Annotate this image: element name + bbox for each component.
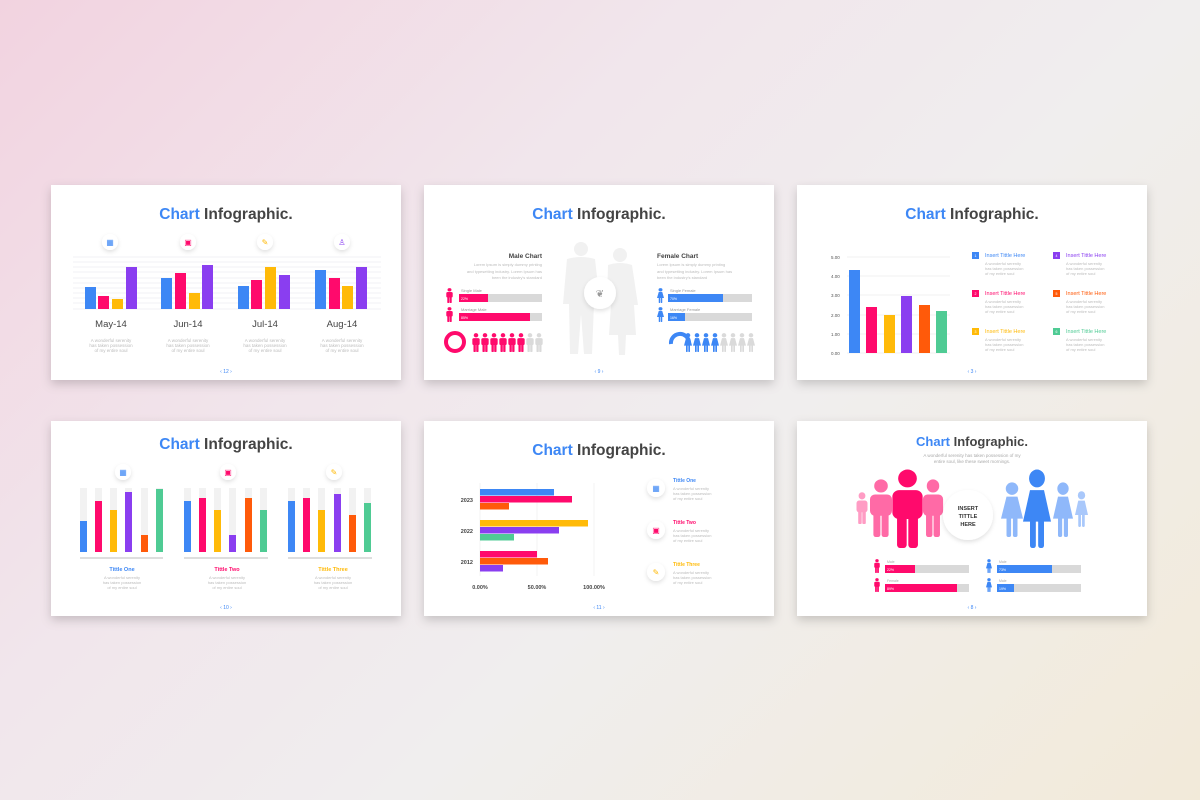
center icon circle xyxy=(584,277,616,309)
legend: has taken possession xyxy=(1066,266,1104,271)
page number: ‹ 10 › xyxy=(220,605,232,611)
center circle: TITTLE xyxy=(959,514,978,520)
descriptions: A wonderful serenity xyxy=(245,338,286,343)
male figures xyxy=(856,470,943,548)
center circle: HERE xyxy=(960,522,976,528)
legend: has taken possession xyxy=(985,304,1023,309)
slide 5: horizontal bar chart: ▣ xyxy=(652,526,660,535)
legend: Insert Tittle Here xyxy=(985,253,1025,259)
slide 1: monthly bar chart: ▣ xyxy=(184,238,192,247)
axis labels: 2023 xyxy=(461,498,473,504)
month labels: Jun-14 xyxy=(173,319,203,330)
subtitle: A wonderful serenity has taken possession of my xyxy=(923,453,1021,458)
legend: 5 xyxy=(1056,292,1058,296)
slide 5: horizontal bar chart: Tittle Three xyxy=(673,562,700,568)
slide 5: horizontal bar chart xyxy=(424,421,774,616)
title: Chart Infographic. xyxy=(159,436,293,453)
horizontal bars xyxy=(480,489,588,572)
column groups xyxy=(80,488,371,552)
icons xyxy=(115,464,342,480)
slide 1: monthly bar chart: ♙ xyxy=(338,238,346,247)
descriptions: of my entire soul xyxy=(248,348,282,353)
female panel: been the industry's standard xyxy=(657,275,707,280)
female figures xyxy=(1001,470,1088,548)
legend: has taken possession xyxy=(985,266,1023,271)
legend: of my entire soul xyxy=(985,271,1014,276)
slide 4: progress column groups: ▣ xyxy=(224,468,232,477)
axis labels xyxy=(831,255,840,356)
month labels xyxy=(95,319,357,330)
descriptions: of my entire soul xyxy=(171,348,205,353)
subtitle: entire soul, like these sweet mornings. xyxy=(934,459,1010,464)
progress bars: 22% xyxy=(887,568,894,572)
descriptions: has taken possession xyxy=(320,343,364,348)
slide 4: progress column groups: of my entire soul xyxy=(212,585,242,590)
slide 5: horizontal bar chart: ▦ xyxy=(652,484,660,493)
month labels: Jul-14 xyxy=(252,319,278,330)
axis labels: 1.00 xyxy=(831,332,840,337)
center circle xyxy=(943,490,993,540)
slide 5: horizontal bar chart: A wonderful serenity xyxy=(673,570,709,575)
legend: 3 xyxy=(975,330,977,334)
legend: Insert Tittle Here xyxy=(1066,329,1106,335)
group titles xyxy=(109,567,348,573)
female panel: Marriage Female xyxy=(670,307,701,312)
slide 5: horizontal bar chart: ✎ xyxy=(653,568,659,577)
male panel xyxy=(446,253,543,352)
slide 4: progress column groups: has taken possession xyxy=(103,580,141,585)
silhouettes xyxy=(563,242,638,355)
female panel: 16% xyxy=(670,316,677,320)
axis labels: 50.00% xyxy=(528,585,546,591)
descriptions: has taken possession xyxy=(243,343,287,348)
female panel: Female Chart xyxy=(657,253,699,260)
month labels: May-14 xyxy=(95,319,127,330)
descriptions xyxy=(89,338,364,353)
legend: Insert Tittle Here xyxy=(1066,291,1106,297)
slide 5: horizontal bar chart: of my entire soul xyxy=(673,580,702,585)
slide 1: monthly bar chart xyxy=(51,185,401,380)
axis labels: 5.00 xyxy=(831,255,840,260)
female panel: Single Female xyxy=(670,288,696,293)
axis labels: 3.00 xyxy=(831,293,840,298)
slide 5: horizontal bar chart: Tittle One xyxy=(673,478,696,484)
legend: Insert Tittle Here xyxy=(985,291,1025,297)
title: Chart Infographic. xyxy=(532,442,666,459)
female panel xyxy=(657,253,755,352)
page number: ‹ 12 › xyxy=(220,369,232,375)
legend: has taken possession xyxy=(1066,304,1104,309)
axis labels: 0.00 xyxy=(831,351,840,356)
month labels: Aug-14 xyxy=(327,319,357,330)
slide 3: column chart with legend xyxy=(797,185,1147,380)
group titles: Tittle Two xyxy=(214,567,240,573)
legend: of my entire soul xyxy=(1066,347,1095,352)
slide 4: progress column groups: A wonderful serenity xyxy=(104,575,140,580)
female panel: 70% xyxy=(670,297,677,301)
icons xyxy=(102,234,350,250)
axis labels: 100.00% xyxy=(583,585,605,591)
slide 5: horizontal bar chart: has taken possession xyxy=(673,491,711,496)
legend: Insert Tittle Here xyxy=(1066,253,1106,259)
slide 4: progress column groups: ▦ xyxy=(119,468,127,477)
legend: of my entire soul xyxy=(985,309,1014,314)
slide 6: people comparison xyxy=(797,421,1147,616)
legend: A wonderful serenity xyxy=(1066,261,1102,266)
group titles: Tittle Three xyxy=(318,567,348,573)
legend: 4 xyxy=(1056,254,1058,258)
descriptions: has taken possession xyxy=(166,343,210,348)
progress bars: 19% xyxy=(999,587,1006,591)
progress bars: Male xyxy=(999,579,1007,583)
progress bars xyxy=(874,559,1081,592)
legend: Insert Tittle Here xyxy=(985,329,1025,335)
subtitle xyxy=(923,453,1021,464)
legend: A wonderful serenity xyxy=(1066,299,1102,304)
descriptions: A wonderful serenity xyxy=(322,338,363,343)
slide 4: progress column groups: A wonderful serenity xyxy=(315,575,351,580)
legend: has taken possession xyxy=(1066,342,1104,347)
slide 5: horizontal bar chart: A wonderful serenity xyxy=(673,528,709,533)
legend: A wonderful serenity xyxy=(985,337,1021,342)
legend: of my entire soul xyxy=(985,347,1014,352)
slide 5: horizontal bar chart: of my entire soul xyxy=(673,496,702,501)
descriptions: of my entire soul xyxy=(94,348,128,353)
male panel: Marriage Male xyxy=(461,307,487,312)
axis labels: 4.00 xyxy=(831,274,840,279)
slide 2: male / female chart xyxy=(424,185,774,380)
title: Chart Infographic. xyxy=(905,206,1039,223)
legend: of my entire soul xyxy=(1066,309,1095,314)
slide 1: monthly bar chart: ▦ xyxy=(106,238,114,247)
slide 5: horizontal bar chart: of my entire soul xyxy=(673,538,702,543)
page number: ‹ 3 › xyxy=(968,369,977,375)
slide 4: progress column groups: ✎ xyxy=(331,468,337,477)
legend xyxy=(972,252,1106,352)
progress bars: 89% xyxy=(887,587,894,591)
slide 5: horizontal bar chart: has taken possession xyxy=(673,575,711,580)
title: Chart Infographic. xyxy=(532,206,666,223)
slide 4: progress column groups: has taken possession xyxy=(208,580,246,585)
male panel: and typesetting industry. Lorem Ipsum has xyxy=(467,269,542,274)
axis labels: 2012 xyxy=(461,560,473,566)
slide 4: progress column groups xyxy=(51,421,401,616)
slide 5: horizontal bar chart: Tittle Two xyxy=(673,520,696,526)
page number: ‹ 9 › xyxy=(595,369,604,375)
descriptions: of my entire soul xyxy=(325,348,359,353)
center circle: INSERT xyxy=(958,506,979,512)
title: Chart Infographic. xyxy=(159,206,293,223)
female panel: Lorem Ipsum is simply dummy printing xyxy=(657,262,725,267)
column chart xyxy=(849,270,947,353)
legend: 6 xyxy=(1056,330,1058,334)
slide 4: progress column groups: of my entire soul xyxy=(107,585,137,590)
legend: has taken possession xyxy=(985,342,1023,347)
page number: ‹ 8 › xyxy=(968,605,977,611)
legend: 1 xyxy=(975,254,977,258)
male panel: Lorem Ipsum is simply dummy printing xyxy=(474,262,542,267)
center icon circle: ❦ xyxy=(596,289,604,300)
descriptions: A wonderful serenity xyxy=(91,338,132,343)
female panel: and typesetting industry. Lorem Ipsum has xyxy=(657,269,732,274)
legend: 2 xyxy=(975,292,977,296)
legend: of my entire soul xyxy=(1066,271,1095,276)
slide 1: monthly bar chart: ✎ xyxy=(262,238,268,247)
male panel: been the industry's standard xyxy=(492,275,542,280)
descriptions: has taken possession xyxy=(89,343,133,348)
progress bars: Female xyxy=(887,579,899,583)
axis labels: 2.00 xyxy=(831,313,840,318)
title: Chart Infographic. xyxy=(916,434,1028,449)
legend: A wonderful serenity xyxy=(1066,337,1102,342)
progress bars: Male xyxy=(887,560,895,564)
slide 4: progress column groups: A wonderful serenity xyxy=(209,575,245,580)
slide 4: progress column groups: of my entire soul xyxy=(318,585,348,590)
male panel: 85% xyxy=(461,316,468,320)
descriptions: A wonderful serenity xyxy=(168,338,209,343)
axis labels: 2022 xyxy=(461,529,473,535)
progress bars: Male xyxy=(999,560,1007,564)
legend items xyxy=(647,479,665,581)
axis labels: 0.00% xyxy=(472,585,488,591)
legend: A wonderful serenity xyxy=(985,261,1021,266)
axis labels xyxy=(461,498,605,591)
page number: ‹ 11 › xyxy=(593,605,605,611)
male panel: 22% xyxy=(461,297,468,301)
slide 4: progress column groups: has taken possession xyxy=(314,580,352,585)
male panel: Single Male xyxy=(461,288,483,293)
male panel: Male Chart xyxy=(509,253,543,260)
slide 5: horizontal bar chart: has taken possession xyxy=(673,533,711,538)
bar chart xyxy=(85,265,367,309)
group titles: Tittle One xyxy=(109,567,135,573)
legend: A wonderful serenity xyxy=(985,299,1021,304)
progress bars: 73% xyxy=(999,568,1006,572)
slide 5: horizontal bar chart: A wonderful serenity xyxy=(673,486,709,491)
